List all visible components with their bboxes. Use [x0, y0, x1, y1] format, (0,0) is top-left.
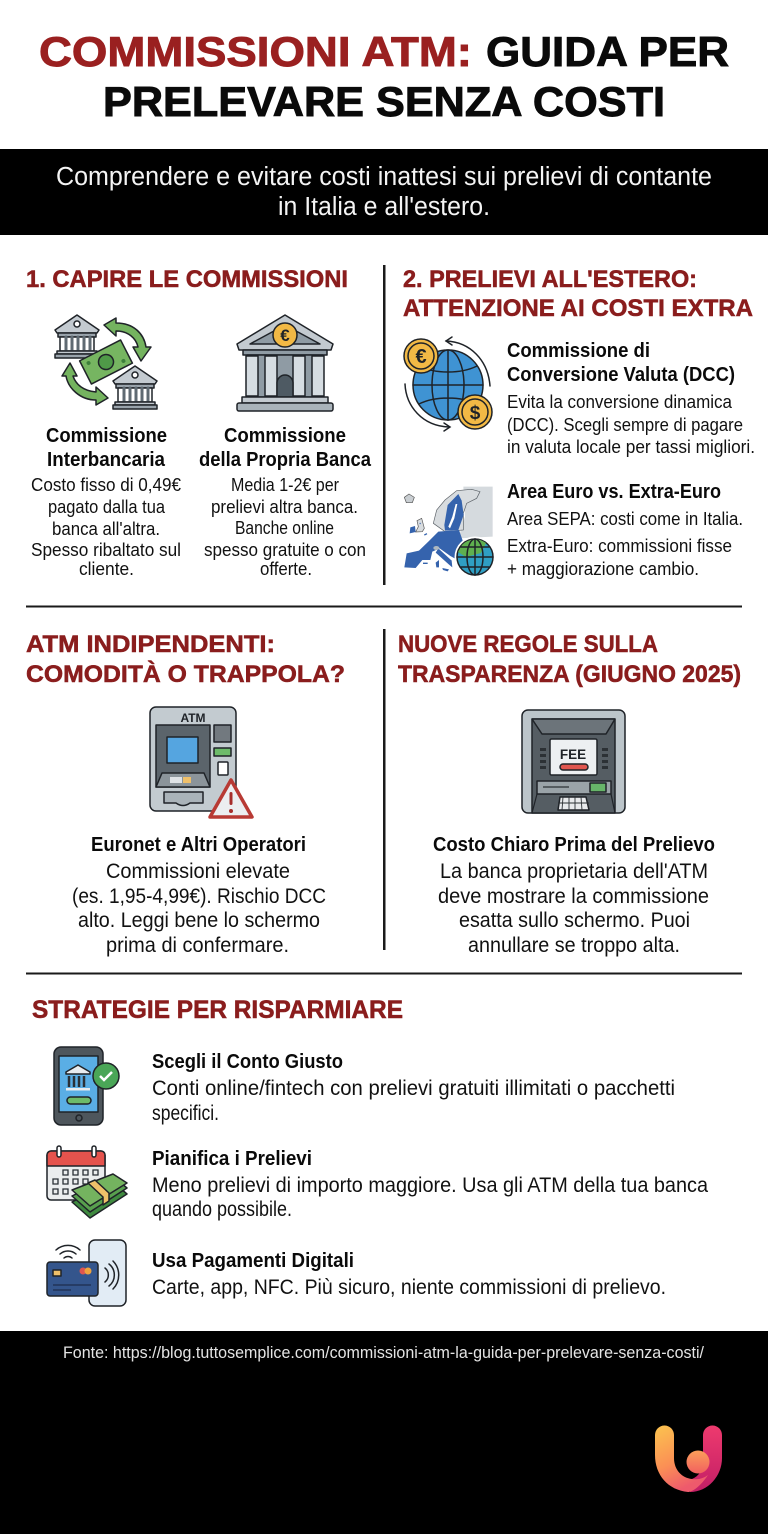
- text block: euronet e altri operatori: [72, 833, 326, 957]
- heading: prelievi all'estero: ATTENZIONE AI COSTI EXTRA: [403, 295, 753, 322]
- text block: commissione della propria banca: offerte.: [260, 558, 312, 579]
- text block: commissione della propria banca: della Propria Banca: [199, 448, 372, 471]
- logo: [655, 1426, 722, 1492]
- icon: globe with currency coins: $: [470, 403, 481, 424]
- icon: card and contactless phone: [47, 1240, 126, 1306]
- text block: commissione della propria banca: prelievi altra banca.: [211, 496, 358, 517]
- strategy item: pianifica i prelievi: Meno prelievi di importo maggiore. Usa gli ATM della tua banca: [152, 1173, 708, 1197]
- text block: commissione di conversione valuta: Commissione di: [507, 339, 650, 362]
- icon: bank with euro: [237, 315, 333, 411]
- text block: commissione interbancaria: Spesso ribaltato sul: [31, 539, 181, 560]
- text block: commissione interbancaria: [31, 424, 182, 579]
- footer: [0, 1331, 768, 1534]
- panel: strategie per risparmiare: [32, 996, 708, 1306]
- text block: costo chiaro: La banca proprietaria dell'ATM: [440, 859, 708, 883]
- strategy item: usa pagamenti digitali: [152, 1249, 666, 1299]
- panel: nuove regole sulla trasparenza: [398, 631, 741, 957]
- icon: phone with bank and check: [54, 1047, 119, 1125]
- text block: euronet e altri operatori: Euronet e Altri Operatori: [91, 833, 306, 856]
- strategy item: usa pagamenti digitali: Carte, app, NFC. Più sicuro, niente commissioni di prelievo.: [152, 1275, 666, 1299]
- text block: commissione della propria banca: spesso gratuite o con: [204, 539, 366, 560]
- panel: prelievi all'estero: [403, 266, 755, 579]
- title: PRELEVARE SENZA COSTI: [103, 78, 665, 125]
- icon: globe with currency coins: €: [415, 346, 427, 368]
- text block: costo chiaro: esatta sullo schermo. Puoi: [459, 908, 690, 932]
- text block: costo chiaro: Costo Chiaro Prima del Prelievo: [433, 833, 715, 856]
- heading: nuove regole: [398, 631, 741, 688]
- text block: costo chiaro: annullare se troppo alta.: [468, 933, 680, 957]
- text block: area euro vs extra-euro: Extra-Euro: commissioni fisse: [507, 535, 732, 556]
- text block: euronet e altri operatori: alto. Leggi bene lo schermo: [78, 908, 320, 932]
- title: COMMISSIONI ATM:: [39, 28, 472, 75]
- title: [39, 28, 729, 125]
- title: GUIDA PER: [486, 28, 729, 75]
- panel: atm indipendenti: [26, 631, 345, 957]
- icon: atm showing fee: [522, 710, 625, 813]
- strategy item: pianifica i prelievi: [152, 1147, 708, 1221]
- icon: bank with euro: €: [280, 326, 290, 345]
- strategy item: usa pagamenti digitali: Usa Pagamenti Digitali: [152, 1249, 354, 1272]
- text block: commissione di conversione valuta: Evita la conversione dinamica: [507, 391, 733, 412]
- icon: atm with warning: ATM: [180, 711, 206, 725]
- subtitle band: [0, 149, 768, 235]
- strategy item: scegli il conto giusto: specifici.: [152, 1101, 219, 1125]
- subtitle band: in Italia e all'estero.: [278, 193, 490, 221]
- text block: costo chiaro: deve mostrare la commissione: [438, 884, 709, 908]
- icon: globe with currency coins: [404, 337, 492, 431]
- text block: area euro vs extra-euro: Area SEPA: costi come in Italia.: [507, 508, 743, 529]
- heading: nuove regole: NUOVE REGOLE SULLA: [398, 631, 658, 658]
- text block: commissione interbancaria: Interbancaria: [47, 448, 166, 471]
- text block: area euro vs extra-euro: + maggiorazione cambio.: [507, 558, 699, 579]
- strategy item: scegli il conto giusto: Scegli il Conto Giusto: [152, 1050, 343, 1073]
- icon: atm with warning: [150, 707, 252, 817]
- icon: interbank exchange: [55, 315, 157, 409]
- heading: atm indipendenti: [26, 631, 345, 688]
- heading: atm indipendenti: COMODITÀ O TRAPPOLA?: [26, 660, 345, 688]
- heading: atm indipendenti: ATM INDIPENDENTI:: [26, 631, 275, 658]
- panel: capire le commissioni: [26, 266, 372, 579]
- text block: commissione interbancaria: pagato dalla tua: [48, 496, 166, 517]
- text block: commissione di conversione valuta: [507, 339, 755, 457]
- strategy item: scegli il conto giusto: [152, 1050, 675, 1125]
- text block: commissione interbancaria: Costo fisso di 0,49€: [31, 474, 182, 495]
- text block: commissione di conversione valuta: in valuta locale per tassi migliori.: [507, 436, 755, 457]
- text block: commissione di conversione valuta: (DCC). Scegli sempre di pagare: [507, 414, 743, 435]
- text block: commissione della propria banca: Commissione: [224, 424, 346, 447]
- icon: calendar and cash: [47, 1146, 127, 1218]
- footer: Fonte: https://blog.tuttosemplice.com/commissioni-atm-la-guida-per-prelevare-senza-costi/: [63, 1343, 704, 1362]
- heading: nuove regole: TRASPARENZA (GIUGNO 2025): [398, 661, 741, 688]
- heading: prelievi all'estero: [403, 266, 753, 322]
- heading: strategie: STRATEGIE PER RISPARMIARE: [32, 996, 403, 1024]
- heading: prelievi all'estero: 2. PRELIEVI ALL'ESTERO:: [403, 266, 697, 293]
- heading: capire le commissioni: 1. CAPIRE LE COMMISSIONI: [26, 266, 348, 293]
- icon: europe map: [404, 487, 496, 578]
- text block: euronet e altri operatori: prima di confermare.: [106, 933, 289, 957]
- subtitle band: Comprendere e evitare costi inattesi sui prelievi di contante: [56, 163, 712, 191]
- text block: commissione interbancaria: cliente.: [79, 558, 134, 579]
- text block: euronet e altri operatori: Commissioni elevate: [106, 859, 290, 883]
- text block: commissione della propria banca: Media 1-2€ per: [231, 474, 339, 495]
- text block: area euro vs extra-euro: [507, 480, 743, 579]
- text block: commissione della propria banca: [199, 424, 372, 579]
- icon: atm showing fee: FEE: [560, 747, 586, 762]
- text block: area euro vs extra-euro: Area Euro vs. Extra-Euro: [507, 480, 721, 503]
- strategy item: pianifica i prelievi: quando possibile.: [152, 1197, 292, 1221]
- text block: euronet e altri operatori: (es. 1,95-4,99€). Rischio DCC: [72, 884, 326, 908]
- text block: commissione della propria banca: Banche online: [235, 517, 334, 538]
- text block: commissione interbancaria: banca all'altra.: [52, 518, 160, 539]
- text block: costo chiaro: [433, 833, 715, 957]
- strategy item: scegli il conto giusto: Conti online/fintech con prelievi gratuiti illimitati o pacchetti: [152, 1076, 675, 1100]
- text block: commissione interbancaria: Commissione: [46, 424, 167, 447]
- text block: commissione di conversione valuta: Conversione Valuta (DCC): [507, 363, 735, 386]
- strategy item: pianifica i prelievi: Pianifica i Prelievi: [152, 1147, 312, 1170]
